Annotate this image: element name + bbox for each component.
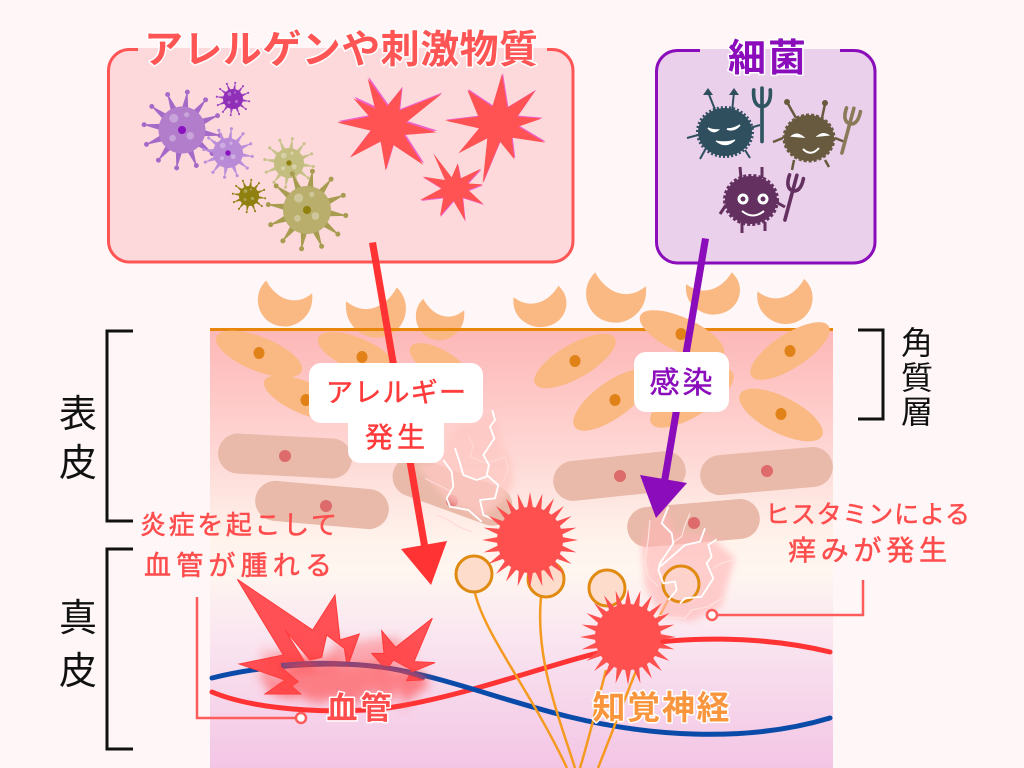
annotation: inflammation swells vessels: 炎症を起こして [140, 510, 337, 540]
annotation: histamine itch: ヒスタミンによる [765, 501, 970, 529]
annotation: histamine itch: 痒みが発生 [788, 535, 947, 566]
label: dermis: 真 [59, 598, 97, 640]
swelling glow around blood vessels [261, 637, 429, 702]
annotation: inflammation swells vessels [140, 510, 337, 581]
icon: large olive virus [265, 168, 349, 252]
histamine burst lower [579, 588, 677, 686]
heading: bacteria: 細菌 [728, 38, 806, 80]
leader line: itch [707, 580, 863, 620]
icon: pale olive virus [263, 137, 315, 189]
annotation: inflammation swells vessels: 血管が腫れる [144, 551, 332, 581]
skin cross-section panel [210, 329, 833, 768]
callout: infection [634, 352, 729, 412]
bracket: stratum corneum [858, 330, 883, 419]
histamine burst upper [481, 491, 579, 589]
label: epidermis: 皮 [59, 443, 97, 485]
nerve endings [456, 556, 625, 606]
heading: allergens and irritants: アレルゲンや刺激物質 [144, 29, 538, 72]
callout: allergy occurrence: アレルギー [326, 378, 466, 408]
epidermis flat orange cells [210, 300, 838, 452]
stratum corneum line [210, 328, 833, 331]
swelling burst shapes [237, 579, 435, 694]
panel: bacteria [655, 38, 876, 264]
icon: irritant stars [337, 73, 546, 222]
label: sensory nerve: 知覚神経 [592, 689, 730, 726]
panel outline [656, 50, 875, 263]
blood vessel: vein [212, 664, 830, 734]
label: stratum corneum: 質 [901, 360, 933, 396]
label: dermis: 皮 [59, 651, 97, 693]
callout: infection: 感染 [650, 367, 712, 400]
icon: blue bacterium with fork [687, 88, 770, 159]
label: blood vessel: 血管 [326, 691, 392, 726]
bracket: dermis [107, 549, 133, 749]
icon: purple bacterium with fork [720, 167, 804, 233]
callout: allergy occurrence [309, 363, 483, 463]
itch glow and lightning near first nerve [415, 410, 513, 532]
icon: medium purple virus [202, 127, 254, 179]
label: epidermis: 表 [59, 394, 97, 436]
label: stratum corneum [901, 325, 933, 430]
icon: large purple virus [141, 89, 223, 171]
itch glow and lightning near second nerve [642, 507, 735, 622]
callout: allergy occurrence: 発生 [365, 422, 425, 453]
surface bacteria crescents [258, 272, 813, 340]
icon: small dark olive virus [232, 179, 266, 213]
arrow: allergy [369, 242, 447, 585]
icon: brown bacterium with fork [773, 99, 861, 170]
epidermis rounded cells [217, 433, 834, 549]
sensory nerve fibres [475, 593, 670, 768]
blood vessel: artery [212, 639, 830, 711]
panel fill [655, 49, 876, 264]
leader line: vessels [197, 597, 306, 723]
bracket: epidermis [107, 331, 133, 521]
label: stratum corneum: 角 [901, 325, 933, 361]
vein over swelling [281, 663, 425, 678]
panel outline [108, 50, 573, 262]
panel: allergens and irritants [107, 29, 574, 263]
arrow: infection [640, 238, 709, 518]
icon: small dark purple virus [216, 82, 250, 116]
label: stratum corneum: 層 [901, 394, 933, 430]
label: dermis [59, 598, 97, 693]
label: epidermis [59, 394, 97, 485]
annotation: histamine itch [765, 501, 970, 566]
panel fill [107, 48, 574, 263]
